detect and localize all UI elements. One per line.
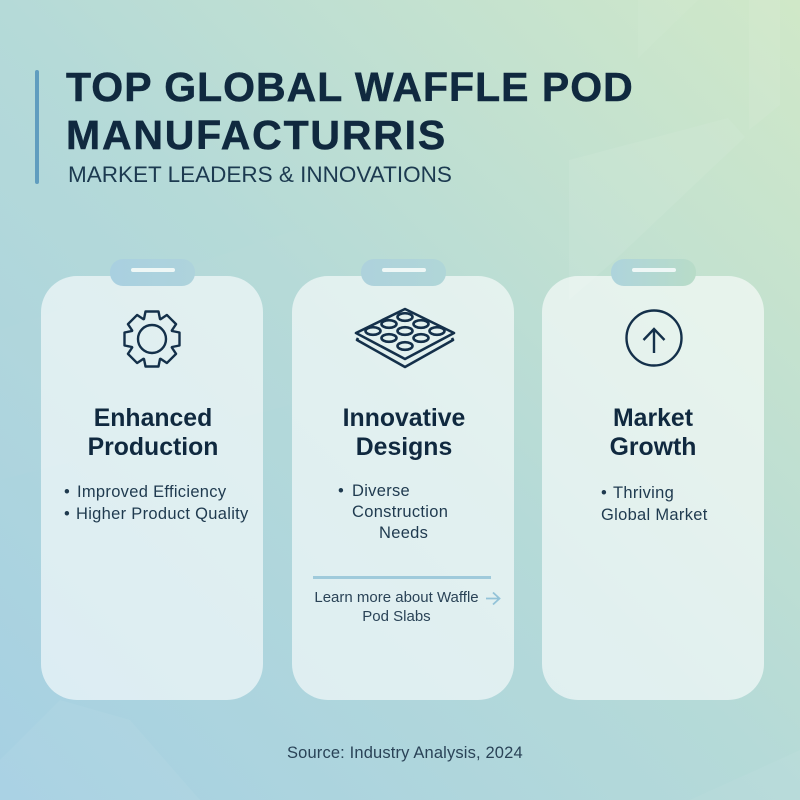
card body bbox=[542, 276, 764, 700]
heading: Growth bbox=[610, 434, 696, 461]
title bbox=[66, 64, 634, 158]
bullets: • bbox=[64, 504, 70, 522]
link text: Learn more about Waffle bbox=[314, 589, 479, 606]
divider bbox=[313, 576, 491, 579]
card tab bbox=[110, 259, 195, 286]
panel: enhanced production bbox=[41, 259, 263, 700]
bullet: • bbox=[601, 484, 607, 502]
panel: innovative designs bbox=[292, 259, 514, 700]
bullet: Global Market bbox=[601, 506, 708, 524]
bullets: Improved Efficiency bbox=[77, 483, 226, 501]
heading: Innovative bbox=[343, 405, 465, 432]
card tab bbox=[611, 259, 696, 286]
bullet: • bbox=[338, 482, 344, 500]
heading: Production bbox=[88, 434, 218, 461]
heading bbox=[343, 405, 465, 461]
heading: Market bbox=[613, 405, 693, 432]
bullets: Higher Product Quality bbox=[76, 504, 249, 522]
title: TOP GLOBAL WAFFLE POD bbox=[66, 64, 634, 110]
heading: Enhanced bbox=[94, 405, 212, 432]
heading bbox=[610, 405, 696, 461]
bullets bbox=[64, 483, 249, 522]
link text: Pod Slabs bbox=[362, 608, 431, 625]
subtitle: MARKET LEADERS & INNOVATIONS bbox=[68, 162, 452, 187]
bullet: Thriving bbox=[613, 484, 674, 502]
heading bbox=[88, 405, 218, 461]
source note: Source: Industry Analysis, 2024 bbox=[287, 744, 523, 762]
card body bbox=[41, 276, 263, 700]
link text bbox=[314, 589, 479, 625]
bullets: • bbox=[64, 483, 70, 501]
card tab bbox=[361, 259, 446, 286]
icon: waffle slab bbox=[354, 308, 456, 368]
icon: arrow bbox=[486, 592, 501, 605]
title: MANUFACTURRIS bbox=[66, 112, 447, 158]
icon: up arrow circle bbox=[625, 309, 683, 367]
card body bbox=[292, 276, 514, 700]
bullet: Needs bbox=[379, 524, 428, 542]
icon: gear bbox=[123, 310, 181, 368]
bullet bbox=[338, 482, 448, 542]
bullet: Construction bbox=[352, 503, 448, 521]
heading: Designs bbox=[356, 434, 452, 461]
panel: market growth bbox=[542, 259, 764, 700]
bullet bbox=[601, 484, 708, 524]
bullet: Diverse bbox=[352, 482, 410, 500]
title accent bar bbox=[35, 70, 39, 184]
